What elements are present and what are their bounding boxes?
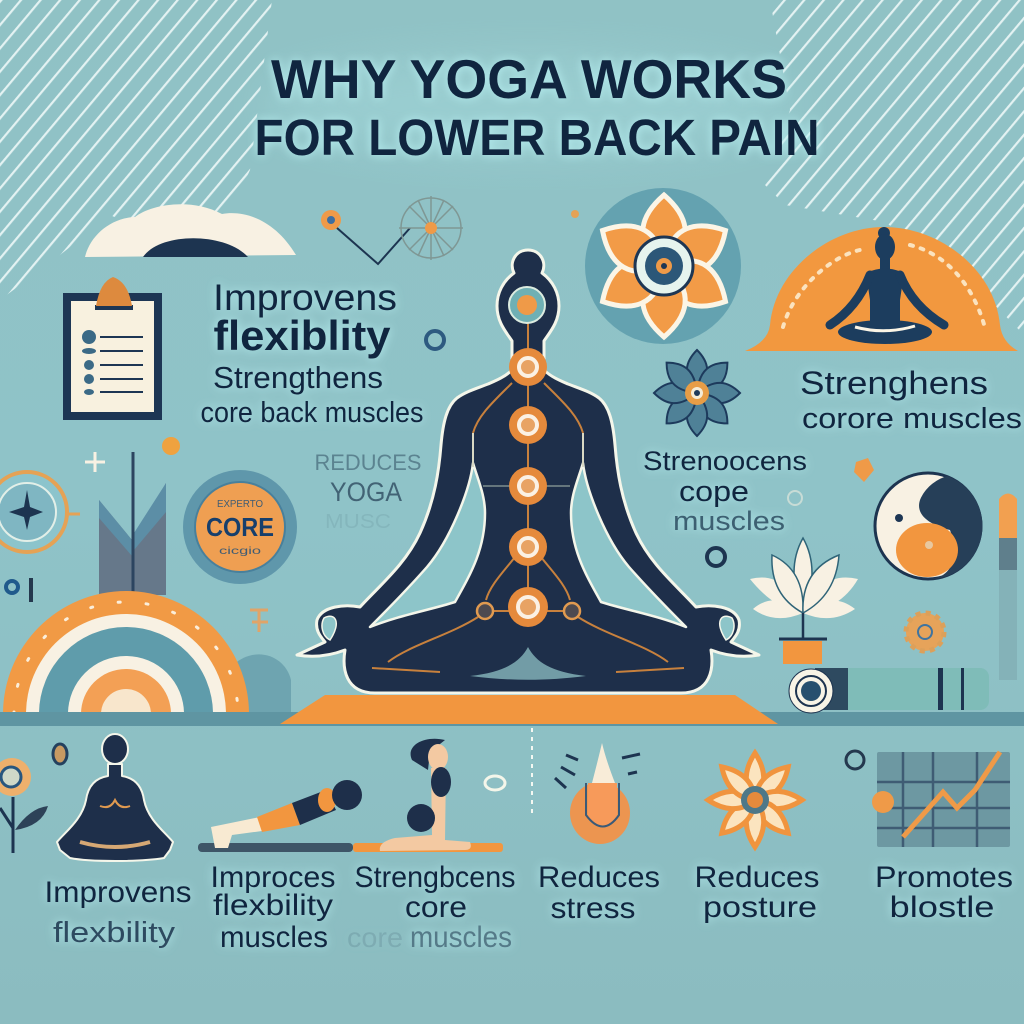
bottom labels: blostle <box>890 891 994 924</box>
bottom labels: muscles <box>410 921 512 954</box>
icon: small ring <box>426 331 444 349</box>
bottom labels: core <box>347 922 403 953</box>
text: faded reduces yoga: MUSC <box>325 511 391 533</box>
title: FOR LOWER BACK PAIN <box>254 109 820 166</box>
bottom labels: stress <box>550 892 636 925</box>
icon: core badge: cicgio <box>219 546 262 557</box>
text: strengthens core muscles center: Strenoocens <box>643 446 807 476</box>
icon: core badge: CORE <box>206 512 274 542</box>
text: faded reduces yoga: REDUCES <box>314 450 422 475</box>
bottom labels: Reduces <box>694 861 820 894</box>
text: strengthens core muscles center <box>643 446 807 536</box>
icon: clipboard checklist <box>67 277 158 416</box>
arm gaps <box>370 463 686 627</box>
text: strengthens core muscles right <box>800 365 1022 435</box>
bottom labels: Improvens <box>44 876 192 909</box>
bottom labels: muscles <box>220 921 328 954</box>
bottom icon: flower stem <box>0 744 67 853</box>
seat highlight <box>470 647 586 680</box>
bottom icon: orange flower <box>708 753 802 847</box>
icon: core badge <box>183 470 297 584</box>
icon: arrow chevron <box>99 452 166 595</box>
bottom labels: Promotes <box>875 861 1013 894</box>
icon: small gear <box>906 613 944 651</box>
bottom icon: growth chart <box>846 751 1010 847</box>
dashed divider <box>531 728 533 815</box>
text: improves flexibility block: Improvens <box>213 277 397 318</box>
yoga mat <box>280 695 778 724</box>
icon: core badge: EXPERTO <box>217 499 263 510</box>
chakra points <box>508 348 548 627</box>
head chakra <box>509 287 545 323</box>
icon: thermometer bar <box>999 494 1017 680</box>
chakra centers <box>518 358 538 617</box>
text: improves flexibility block: core back muscles <box>200 397 424 429</box>
text: improves flexibility block <box>200 277 424 429</box>
floor band <box>0 712 1024 726</box>
icon: yin yang circle <box>875 473 982 579</box>
icon: flower in circle <box>585 188 741 344</box>
title <box>254 48 820 166</box>
figure: seated yoga body with chakras <box>297 250 759 693</box>
text: strengthens core muscles center: cope <box>679 476 749 508</box>
bottom labels: Strengbcens <box>354 861 516 894</box>
hand curls <box>322 616 734 640</box>
bottom icon: meditating figure <box>57 734 173 861</box>
small accents <box>6 210 874 632</box>
title: WHY YOGA WORKS <box>271 48 787 110</box>
text: improves flexibility block: Strengthens <box>213 360 383 395</box>
bottom labels: core <box>405 891 467 924</box>
bottom icon: capsule stress <box>555 743 640 844</box>
text: strengthens core muscles right: Strenghens <box>800 365 988 401</box>
text: improves flexibility block: flexiblity <box>214 312 391 359</box>
text: strengthens core muscles right: corore muscles <box>802 403 1022 435</box>
teal hill <box>233 654 291 712</box>
bottom icon: seated stretch <box>353 739 505 852</box>
icon: cloud <box>85 204 296 257</box>
icon: meditating figure on orange sun <box>745 227 1018 351</box>
text: strengthens core muscles center: muscles <box>673 506 785 536</box>
icon: small flower <box>654 350 740 436</box>
bottom labels: flexbility <box>53 917 176 949</box>
bottom icon: plank pose <box>198 780 362 852</box>
icon: network sun <box>321 196 463 264</box>
icon: rolled mat <box>789 668 989 713</box>
bottom labels: posture <box>703 891 817 924</box>
bottom labels <box>44 861 1013 954</box>
body lines <box>372 320 684 672</box>
icon: compass circle <box>0 472 80 552</box>
icon: lotus plant <box>750 538 858 664</box>
bottom labels: flexbility <box>213 889 333 922</box>
text: faded reduces yoga <box>314 450 422 533</box>
bottom labels: Improces <box>210 861 336 894</box>
bottom labels: Reduces <box>538 861 660 894</box>
hip nodes <box>477 603 580 619</box>
text: faded reduces yoga: YOGA <box>330 477 402 507</box>
icon: rainbow arch <box>3 591 249 712</box>
